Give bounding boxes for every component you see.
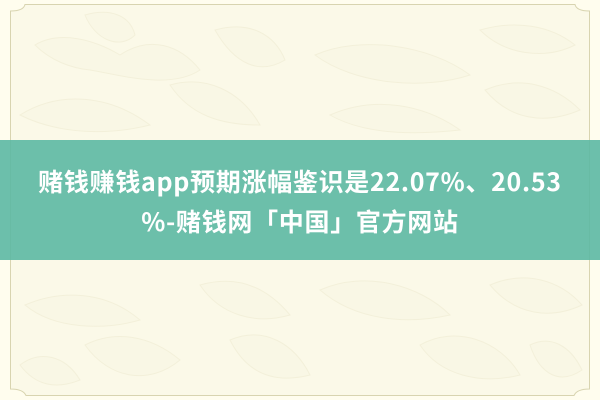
title: %-赌钱网「中国」官方网站	[141, 203, 459, 239]
teal title band	[0, 140, 600, 260]
title	[38, 163, 562, 239]
title: 赌钱赚钱app预期涨幅鉴识是22.07%、20.53	[38, 163, 562, 199]
